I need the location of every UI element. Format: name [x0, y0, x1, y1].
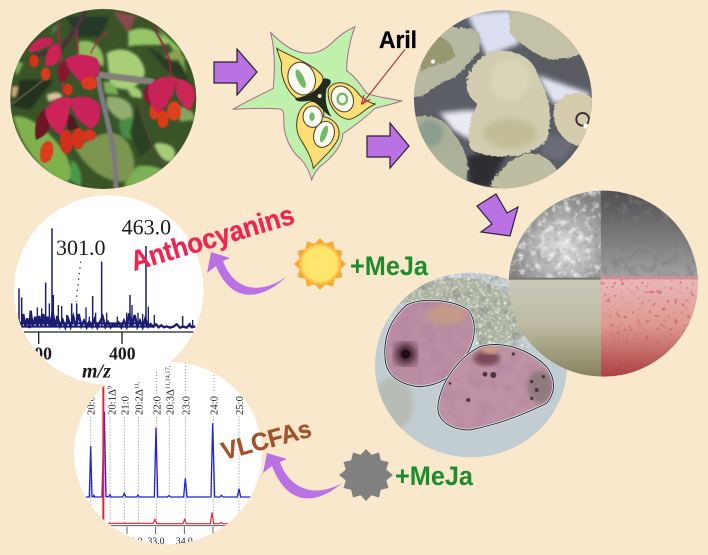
red trace: [108, 512, 229, 524]
mass axis: [24, 332, 193, 344]
label: Anthocyanins: Anthocyanins: [127, 199, 298, 277]
label: VLCFAs: VLCFAs: [218, 415, 314, 466]
icon: darkness burst: [339, 449, 393, 501]
aril pointer line: [361, 49, 405, 104]
peak labels: 24:0: [210, 396, 221, 415]
peak labels: [87, 365, 246, 415]
dark central column: [295, 78, 332, 117]
peak labels: 22:0: [152, 396, 163, 415]
quadrant: control top: [507, 190, 601, 279]
photo: culture tubes, control vs MeJa: [507, 190, 701, 379]
label: +MeJa with light: +MeJa: [350, 251, 429, 281]
axis labels: 200: [25, 343, 52, 363]
spectrum panel: VLCFAs chromatogram: [74, 360, 262, 547]
axis labels: [132, 538, 192, 544]
peak labels: 11,: [133, 381, 140, 389]
capsules and seeds: [28, 37, 195, 163]
photo: fruit of spindle tree: [7, 7, 200, 193]
quadrant: control medium: [507, 279, 601, 379]
photo: pigmented cells under microscope: [370, 270, 570, 460]
seeds: [283, 58, 358, 150]
spectrum panel: anthocyanin mass spectrum: [14, 195, 203, 385]
spectrum panel: anthocyanin mass spectrum: m/z: [82, 360, 111, 382]
time axis: [108, 526, 227, 534]
spectrum panel: anthocyanin mass spectrum: 400: [109, 343, 136, 363]
curved arrow: light to anthocyanins: [207, 252, 286, 295]
quadrant: MeJa top: [601, 190, 701, 279]
peak labels: 25:0: [235, 396, 246, 415]
arrow: fruit to section: [214, 49, 257, 95]
axis labels: 33.0: [148, 536, 165, 547]
axis labels: 34.0: [176, 536, 193, 547]
curved arrow: dark to VLCFAs: [263, 453, 342, 498]
peak labels: 20:1Δ: [107, 389, 118, 415]
quadrant: MeJa pigmented medium: [601, 276, 701, 379]
spectrum trace: [19, 228, 195, 328]
peak labels: 301.0: [56, 235, 105, 260]
retention marker lines: [91, 360, 239, 523]
axis labels: 32.0: [126, 536, 143, 547]
embryos: [293, 68, 347, 143]
cell debris and walls texture: [390, 273, 530, 350]
green capsule outline: [233, 27, 402, 180]
peak labels: 20:3Δ: [166, 389, 177, 415]
icon: sun: [294, 238, 346, 290]
arrow: section to callus: [367, 123, 409, 168]
diagram: fruit cross-section: [233, 27, 405, 180]
blue trace: [86, 412, 251, 497]
cell one: [383, 297, 480, 390]
cell two: [437, 340, 557, 432]
peak labels: 21:0: [120, 396, 131, 415]
spectrum panel: anthocyanin mass spectrum: 463.0: [122, 215, 171, 240]
photo: callus culture: [410, 7, 597, 193]
peak labels: 9: [106, 386, 113, 389]
branches: [13, 13, 171, 188]
peak labels: 20:2Δ: [134, 389, 145, 415]
label: +MeJa in dark: +MeJa: [395, 461, 474, 491]
peak labels: 23:0: [182, 396, 193, 415]
arrow: callus to culture tubes: [477, 194, 518, 236]
peak labels: 20:0: [87, 396, 98, 415]
peak labels: 11,14,17,: [165, 365, 172, 389]
label: Aril: Aril: [379, 27, 417, 54]
yellow aril lobes: [277, 48, 376, 168]
